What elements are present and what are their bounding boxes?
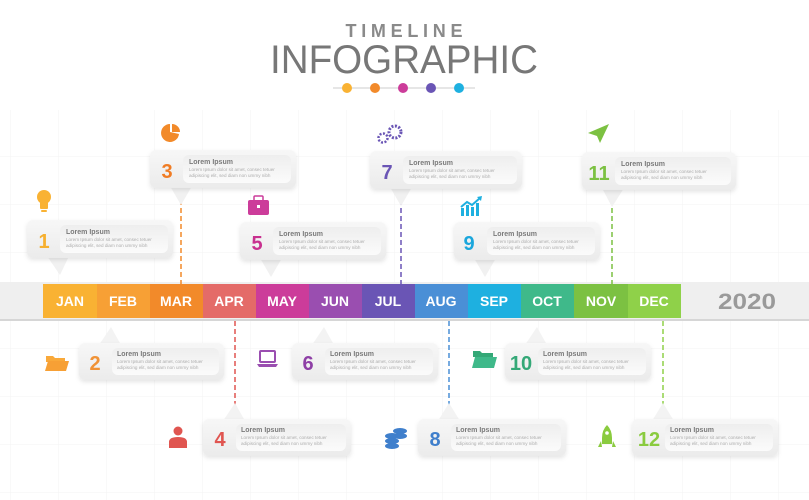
card 7: Lorem Ipsum — [409, 160, 453, 167]
months: AUG — [425, 293, 457, 309]
card 3: 3 — [161, 161, 173, 183]
card 11 — [582, 152, 736, 207]
months — [43, 284, 681, 318]
card 3 — [150, 150, 296, 205]
months: APR — [214, 293, 244, 309]
card 12: adipiscing elit, sed diam non ummy nibh — [670, 441, 752, 446]
year: 2020 — [718, 289, 776, 314]
icon: bulb — [37, 190, 51, 212]
card 10 — [505, 327, 651, 380]
card 1: adipiscing elit, sed diam non ummy nibh — [66, 243, 148, 248]
card 5: Lorem Ipsum dolor sit amet, consec tetuer — [279, 239, 365, 244]
icon: laptop — [257, 351, 278, 367]
card 2: 2 — [89, 353, 101, 375]
card 9: Lorem Ipsum — [493, 231, 537, 238]
card 5: Lorem Ipsum — [279, 231, 323, 238]
icon: database coins — [385, 428, 407, 449]
icon: person — [169, 426, 187, 448]
card 7 — [370, 151, 522, 206]
months: FEB — [109, 293, 137, 309]
months: MAR — [160, 293, 192, 309]
months: OCT — [532, 293, 562, 309]
months: JUL — [375, 293, 402, 309]
card 2: adipiscing elit, sed diam non ummy nibh — [117, 365, 199, 370]
card 1: 1 — [38, 231, 50, 253]
card 6 — [292, 327, 438, 380]
card 10: adipiscing elit, sed diam non ummy nibh — [543, 365, 625, 370]
card 6: 6 — [302, 353, 314, 375]
dashed connectors — [181, 192, 663, 405]
card 6: Lorem Ipsum — [330, 351, 374, 358]
months: JUN — [321, 293, 349, 309]
card 7: 7 — [381, 162, 393, 184]
card 9: adipiscing elit, sed diam non ummy nibh — [493, 245, 575, 250]
card 3: Lorem Ipsum dolor sit amet, consec tetuer — [189, 167, 275, 172]
card 1: Lorem Ipsum dolor sit amet, consec tetuer — [66, 237, 152, 242]
months: NOV — [586, 293, 617, 309]
card 6: adipiscing elit, sed diam non ummy nibh — [330, 365, 412, 370]
title: INFOGRAPHIC — [270, 38, 538, 82]
card 8: 8 — [429, 429, 441, 451]
card 4: adipiscing elit, sed diam non ummy nibh — [241, 441, 323, 446]
timeline bar — [0, 282, 809, 321]
card 9 — [454, 222, 600, 277]
months: SEP — [480, 293, 508, 309]
card 9: 9 — [463, 233, 475, 255]
icon: folder green — [472, 351, 497, 368]
card 3: adipiscing elit, sed diam non ummy nibh — [189, 173, 271, 178]
card 2: Lorem Ipsum dolor sit amet, consec tetuer — [117, 359, 203, 364]
icon: gears — [378, 126, 401, 142]
months: JAN — [56, 293, 84, 309]
card 8: Lorem Ipsum dolor sit amet, consec tetuer — [456, 435, 542, 440]
card 5 — [240, 222, 386, 277]
card 11: Lorem Ipsum — [621, 161, 665, 168]
card 10: Lorem Ipsum dolor sit amet, consec tetuer — [543, 359, 629, 364]
card 11: Lorem Ipsum dolor sit amet, consec tetuer — [621, 169, 707, 174]
card 12 — [632, 403, 778, 456]
card 12: Lorem Ipsum dolor sit amet, consec tetuer — [670, 435, 756, 440]
card 10: 10 — [510, 353, 532, 375]
card 8: adipiscing elit, sed diam non ummy nibh — [456, 441, 538, 446]
card 8 — [418, 403, 566, 456]
icon: pie chart — [161, 124, 180, 142]
card 4 — [203, 403, 351, 456]
card 11: 11 — [588, 163, 610, 185]
months: MAY — [267, 293, 298, 309]
card 11: adipiscing elit, sed diam non ummy nibh — [621, 175, 703, 180]
card 9: Lorem Ipsum dolor sit amet, consec tetuer — [493, 239, 579, 244]
icon: rocket — [598, 425, 616, 447]
card 3: Lorem Ipsum — [189, 159, 233, 166]
card 7: adipiscing elit, sed diam non ummy nibh — [409, 174, 491, 179]
title: TIMELINE — [346, 21, 462, 41]
card 4: 4 — [214, 429, 226, 451]
title dots — [333, 83, 475, 93]
card 7: Lorem Ipsum dolor sit amet, consec tetuer — [409, 168, 495, 173]
card 4: Lorem Ipsum dolor sit amet, consec tetuer — [241, 435, 327, 440]
card 4: Lorem Ipsum — [241, 427, 285, 434]
icon: folder orange — [45, 356, 69, 371]
card 1: Lorem Ipsum — [66, 229, 110, 236]
card 12: 12 — [638, 429, 660, 451]
icon: growth chart — [461, 196, 482, 216]
card 12: Lorem Ipsum — [670, 427, 714, 434]
card 2 — [79, 327, 224, 380]
card 6: Lorem Ipsum dolor sit amet, consec tetuer — [330, 359, 416, 364]
icon: paper plane — [588, 124, 609, 143]
card 5: 5 — [251, 233, 263, 255]
card 10: Lorem Ipsum — [543, 351, 587, 358]
card 2: Lorem Ipsum — [117, 351, 161, 358]
card 5: adipiscing elit, sed diam non ummy nibh — [279, 245, 361, 250]
card 1 — [27, 220, 173, 275]
card 8: Lorem Ipsum — [456, 427, 500, 434]
months: DEC — [639, 293, 669, 309]
icon: briefcase — [248, 196, 269, 215]
